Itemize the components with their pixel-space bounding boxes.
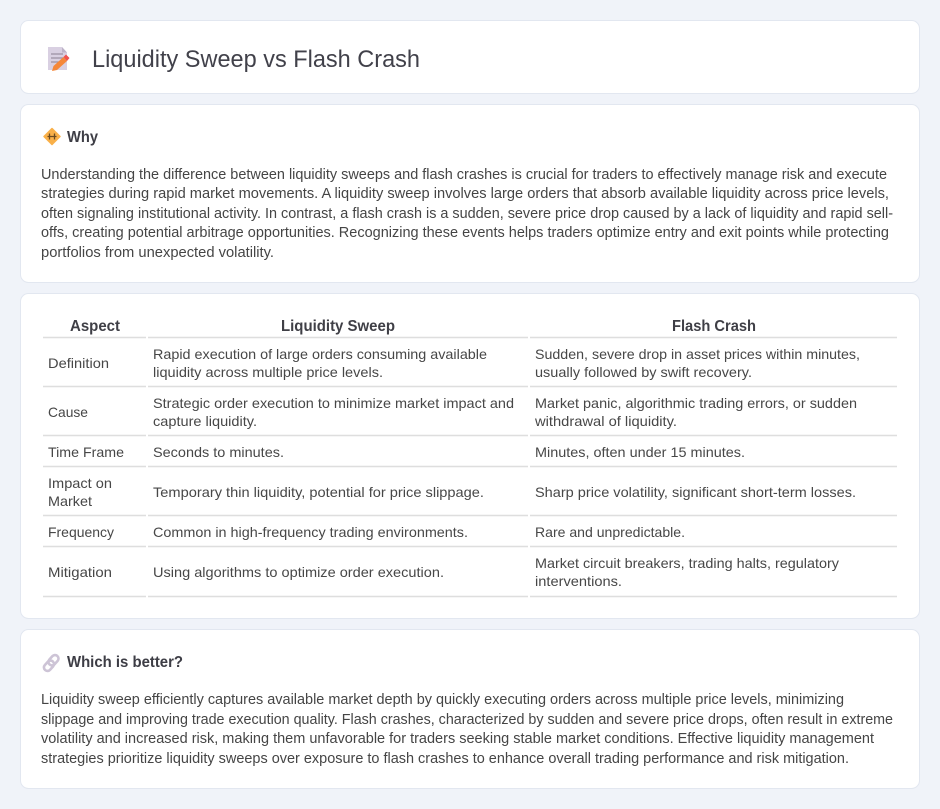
- row: frequency: Frequency: [48, 524, 114, 540]
- row: frequency: [48, 524, 685, 540]
- row: frequency: Rare and unpredictable.: [535, 524, 685, 540]
- row: definition: liquidity across multiple price levels.: [153, 364, 383, 380]
- table header: Aspect: [70, 318, 121, 335]
- icon: memo and pencil: [48, 47, 70, 71]
- text: why paragraph: often signaling institutional activity. In contrast, a flash crash is a sudden, severe price drop caused by a lack of liquidity and rapid sell-: [41, 206, 893, 222]
- row: time frame: [48, 444, 745, 460]
- text: which paragraph: slippage and improving trade execution quality. Flash crashes, characterized by sudden and severe price drops, often result in extreme: [41, 712, 893, 728]
- row: definition: usually followed by swift recovery.: [535, 364, 752, 380]
- row: impact on market: Market: [48, 493, 92, 509]
- row: time frame: Time Frame: [48, 444, 124, 460]
- row: time frame: Seconds to minutes.: [153, 444, 284, 460]
- table header: [70, 318, 756, 335]
- row: mitigation: [48, 555, 839, 589]
- icon: link: [43, 654, 60, 672]
- row: definition: Rapid execution of large orders consuming available: [153, 346, 487, 362]
- panel: header: [20, 20, 920, 94]
- text: why paragraph: Understanding the difference between liquidity sweeps and flash crashes is crucial for traders to effectively manage risk and execute: [41, 167, 887, 183]
- text: why paragraph: offs, creating potential arbitrage opportunities. Recognizing these events helps traders optimize entry and exit points while protecting: [41, 225, 889, 241]
- row: cause: capture liquidity.: [153, 413, 257, 429]
- row: time frame: Minutes, often under 15 minutes.: [535, 444, 745, 460]
- row: impact on market: Sharp price volatility, significant short-term losses.: [535, 484, 856, 500]
- text: why paragraph: portfolios from unexpected volatility.: [41, 245, 274, 261]
- row: impact on market: Temporary thin liquidity, potential for price slippage.: [153, 484, 484, 500]
- icon: warning diamond: [44, 128, 60, 144]
- heading: which is better: Which is better?: [67, 654, 183, 671]
- row: frequency: Common in high-frequency trading environments.: [153, 524, 468, 540]
- text: which paragraph: [41, 692, 893, 767]
- row: definition: [48, 346, 860, 380]
- row: cause: Cause: [48, 404, 88, 420]
- text: why paragraph: strategies during rapid market movements. A liquidity sweep involves large orders that absorb available liquidity across price levels,: [41, 186, 889, 202]
- row: impact on market: Impact on: [48, 475, 112, 491]
- row: mitigation: Market circuit breakers, trading halts, regulatory: [535, 555, 839, 571]
- text: which paragraph: volatility and increased risk, making them unfavorable for traders seeking stable market conditions. Effective liquidity management: [41, 731, 874, 747]
- panel: why: [20, 104, 920, 282]
- text: why paragraph: [41, 167, 893, 261]
- text: which paragraph: strategies prioritize liquidity sweeps over exposure to flash crashes to enhance overall trading performance and risk mitigation.: [41, 751, 849, 767]
- row: mitigation: Using algorithms to optimize order execution.: [153, 564, 444, 580]
- row: cause: withdrawal of liquidity.: [534, 413, 677, 429]
- row: mitigation: interventions.: [535, 573, 622, 589]
- row: impact on market: [48, 475, 856, 509]
- panel: which is better: [20, 630, 920, 788]
- heading: why: Why: [67, 129, 98, 146]
- text: which paragraph: Liquidity sweep efficiently captures available market depth by quickly executing orders across multiple price levels, minimizing: [41, 692, 844, 708]
- row: definition: Sudden, severe drop in asset prices within minutes,: [535, 346, 860, 362]
- panel: comparison table: [20, 294, 920, 618]
- row: cause: [48, 395, 857, 429]
- row: cause: Market panic, algorithmic trading errors, or sudden: [535, 395, 857, 411]
- row: definition: Definition: [48, 355, 109, 371]
- table header: Liquidity Sweep: [281, 318, 395, 335]
- table header: Flash Crash: [672, 318, 756, 335]
- title: Liquidity Sweep vs Flash Crash: [92, 46, 420, 73]
- row: cause: Strategic order execution to minimize market impact and: [153, 395, 514, 411]
- row: mitigation: Mitigation: [48, 564, 112, 580]
